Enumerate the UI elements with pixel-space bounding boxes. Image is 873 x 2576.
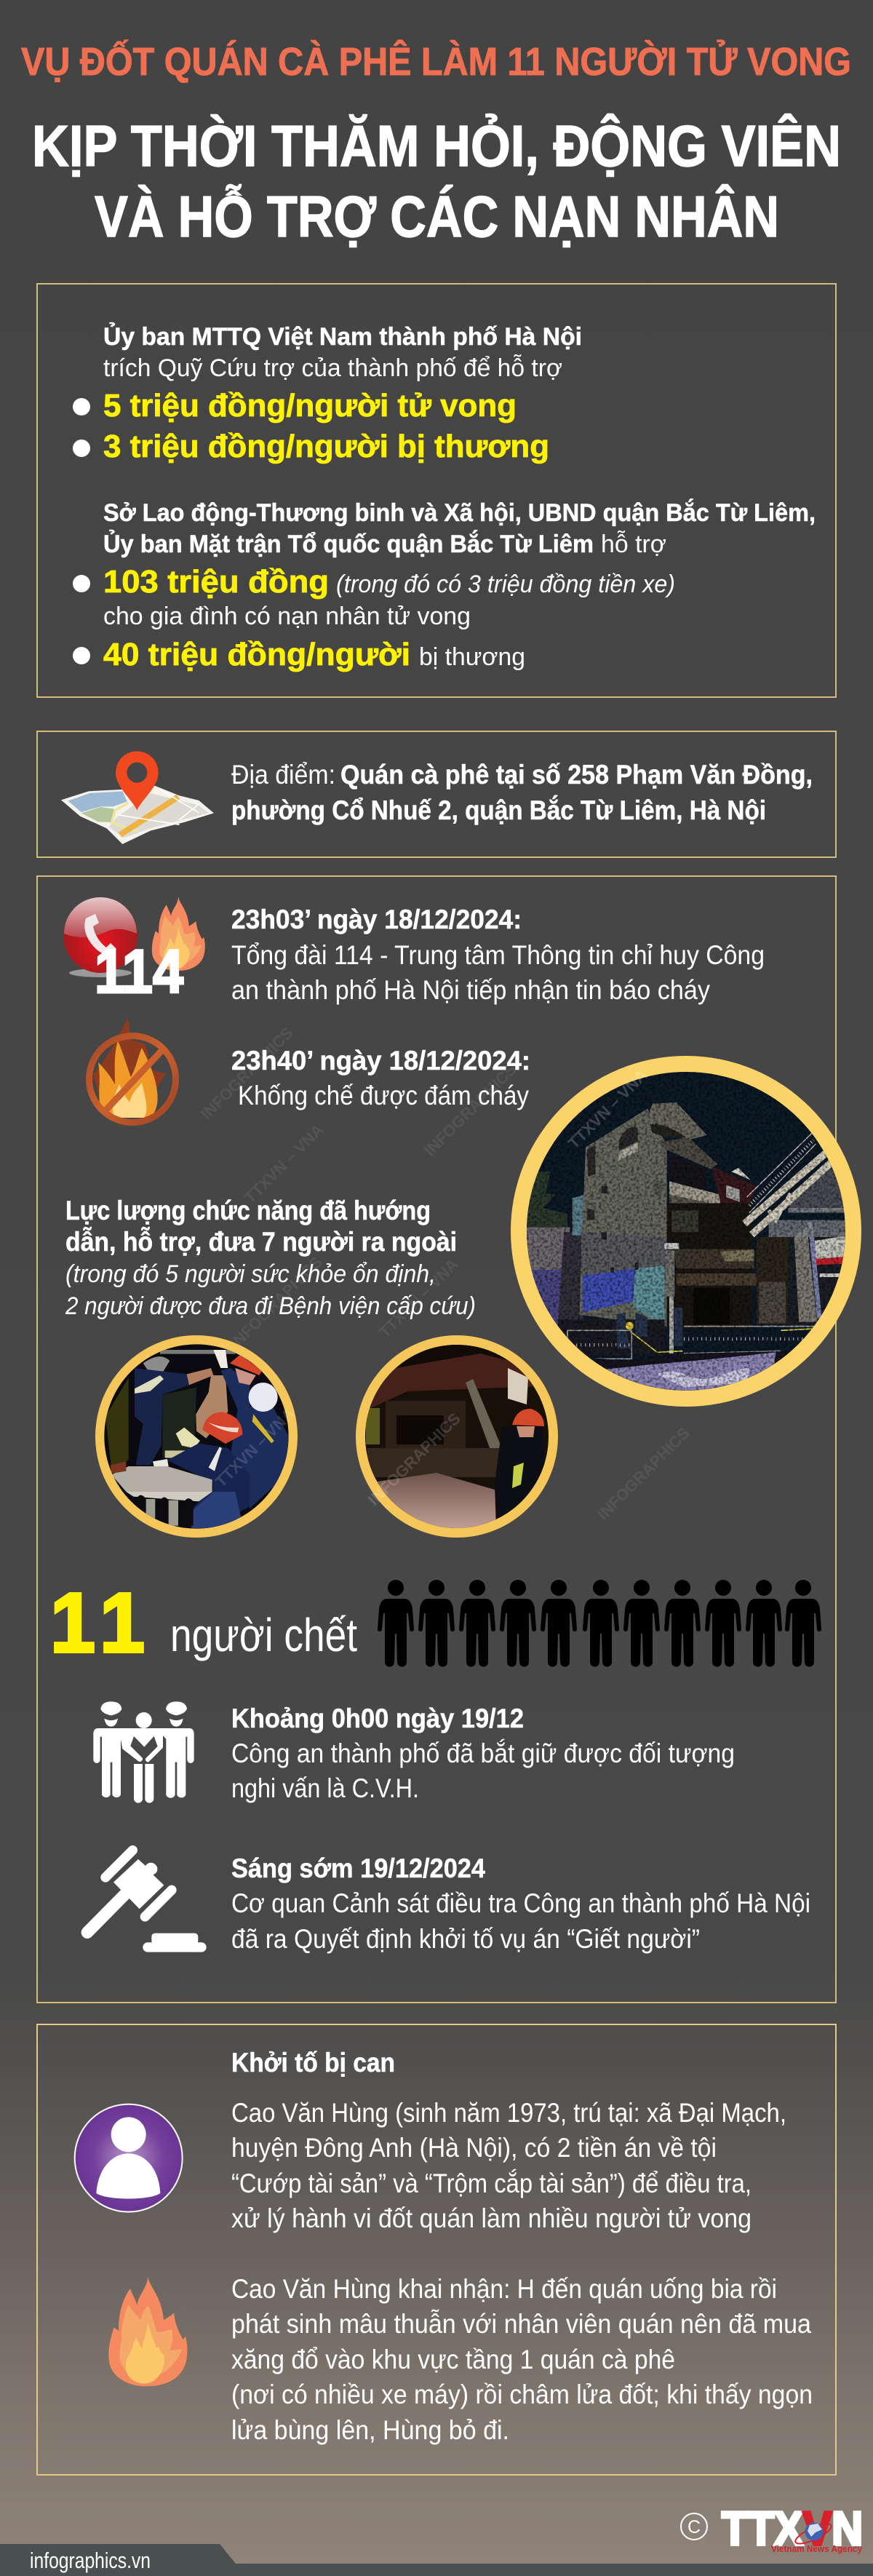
icon: 114 phone and flame bbox=[63, 897, 205, 1006]
number 114: 114 bbox=[95, 937, 183, 1006]
text: location label: Địa điểm: bbox=[231, 760, 335, 790]
photo watermark: TTXVN – VNA bbox=[212, 1404, 298, 1491]
footer band bbox=[0, 2544, 873, 2576]
logo: TTXVN bbox=[681, 2502, 863, 2555]
text: arrest: nghi vấn là C.V.H. bbox=[231, 1773, 419, 1803]
icon: police arrest bbox=[93, 1701, 194, 1803]
bullet: 103 million bbox=[73, 575, 90, 592]
watermarks: INFOGRAPHICS bbox=[226, 1253, 326, 1353]
bullet: 5 million bbox=[73, 398, 90, 416]
text: rescue description bbox=[65, 1196, 476, 1320]
photo watermark: TTXVN – VNA bbox=[565, 1066, 651, 1153]
text: rescue description: dẫn, hỗ trợ, đưa 7 người ra ngoài bbox=[65, 1227, 457, 1257]
icon: suspect bbox=[75, 2104, 183, 2212]
text: 23h03 event bbox=[231, 905, 765, 1005]
watermarks: TTXVN – VNA bbox=[241, 1121, 327, 1207]
icon: fire under control bbox=[89, 1016, 176, 1122]
phone ball highlight bbox=[64, 897, 137, 937]
text: confession: phát sinh mâu thuẫn với nhân viên quán nên đã mua bbox=[231, 2309, 811, 2339]
text: 23h03 event: Tổng đài 114 - Trung tâm Thông tin chỉ huy Công bbox=[231, 940, 765, 970]
panel: timeline bbox=[37, 876, 861, 2003]
photo: firefighters rescuing bbox=[95, 1335, 298, 1538]
text: address line 2: phường Cổ Nhuế 2, quận Bắc Từ Liêm, Hà Nội bbox=[231, 795, 766, 825]
number 11: 1 bbox=[50, 1575, 95, 1670]
text: confession: xăng đổ vào khu vực tầng 1 quán cà phê bbox=[231, 2345, 675, 2374]
phone ball bbox=[63, 899, 137, 973]
photo watermark: INFOGRAPHICS bbox=[364, 1410, 464, 1509]
text: injured: bị thương bbox=[419, 643, 525, 671]
text: arrest: Công an thành phố đã bắt giữ được đối tượng bbox=[231, 1738, 735, 1768]
text: 23h03 event: an thành phố Hà Nội tiếp nhận tin báo cháy bbox=[231, 975, 710, 1005]
text: confession bbox=[231, 2274, 813, 2445]
text: arrest: Khoảng 0h00 ngày 19/12 bbox=[231, 1704, 524, 1733]
phone handset bbox=[84, 914, 116, 956]
panel: support amounts bbox=[37, 284, 836, 697]
globe bbox=[793, 2520, 834, 2548]
watermarks bbox=[197, 1024, 693, 1524]
photo: burned street with firefighter bbox=[356, 1335, 558, 1538]
amount: 103 million: 103 triệu đồng bbox=[103, 564, 329, 600]
heading: prosecuted: Khởi tố bị can bbox=[231, 2048, 395, 2078]
bullet: 3 million bbox=[73, 440, 90, 457]
text: confession: Cao Văn Hùng khai nhận: H đến quán uống bia rồi bbox=[231, 2274, 777, 2304]
copyright mark: C bbox=[687, 2517, 701, 2537]
text: confession: lửa bùng lên, Hùng bỏ đi. bbox=[231, 2415, 509, 2445]
text: people dead: người chết bbox=[170, 1609, 357, 1661]
icon: gavel bbox=[87, 1850, 207, 1952]
bullet: 40 million bbox=[73, 647, 90, 664]
text: rescue description: (trong đó 5 người sức khỏe ổn định, bbox=[65, 1260, 436, 1288]
copyright mark bbox=[681, 2513, 707, 2540]
footer website: infographics.vn bbox=[30, 2548, 151, 2573]
text: support: hỗ trợ bbox=[601, 530, 666, 558]
text: address line 1: Quán cà phê tại số 258 Phạm Văn Đồng, bbox=[340, 760, 813, 790]
panel: prosecution bbox=[37, 2024, 836, 2475]
phone shadow bbox=[69, 969, 132, 977]
text: case opened: đã ra Quyết định khởi tố vụ án “Giết người” bbox=[231, 1924, 700, 1954]
panel: location bbox=[37, 731, 836, 857]
text: relief fund: trích Quỹ Cứu trợ của thành phố để hỗ trợ bbox=[103, 354, 562, 382]
main heading line 2: VÀ HỖ TRỢ CÁC NẠN NHÂN bbox=[95, 184, 779, 249]
text: 23h03 event: 23h03’ ngày 18/12/2024: bbox=[231, 905, 522, 934]
text: arrest bbox=[231, 1704, 735, 1803]
watermarks: INFOGRAPHICS bbox=[420, 1060, 520, 1160]
text: suspect background: Cao Văn Hùng (sinh năm 1973, trú tại: xã Đại Mạch, bbox=[231, 2098, 786, 2128]
watermarks: INFOGRAPHICS bbox=[594, 1424, 693, 1524]
text: district front: Ủy ban Mặt trận Tổ quốc quận Bắc Từ Liêm bbox=[103, 530, 594, 558]
amount: 3 million: 3 triệu đồng/người bị thương bbox=[103, 429, 549, 464]
icon: map with pin bbox=[61, 751, 214, 844]
text: rescue description: Lực lượng chức năng đã hướng bbox=[65, 1196, 431, 1225]
watermarks: INFOGRAPHICS bbox=[197, 1024, 297, 1124]
stat: 11 deaths bbox=[50, 1575, 821, 1670]
text: case opened: Cơ quan Cảnh sát điều tra Công an thành phố Hà Nội bbox=[231, 1888, 810, 1918]
number 11: 1 bbox=[100, 1575, 145, 1670]
text: 23h40 event bbox=[231, 1046, 530, 1110]
amount: 5 million: 5 triệu đồng/người tử vong bbox=[103, 388, 517, 424]
text: suspect background: “Cướp tài sản” và “Trộm cắp tài sản”) để điều tra, bbox=[231, 2168, 752, 2198]
photo: burned building bbox=[511, 1056, 861, 1407]
agency tagline: Vietnam News Agency bbox=[771, 2543, 863, 2554]
note: travel money: (trong đó có 3 triệu đồng tiền xe) bbox=[336, 571, 675, 598]
text: victims' families: cho gia đình có nạn nhân tử vong bbox=[103, 603, 471, 630]
text: suspect background bbox=[231, 2098, 786, 2233]
watermarks: TTXVN – VNA bbox=[375, 1255, 462, 1342]
text: 23h40 event: 23h40’ ngày 18/12/2024: bbox=[231, 1046, 530, 1076]
icon: flame bbox=[152, 897, 205, 971]
wordmark: TTXVN bbox=[722, 2502, 863, 2555]
title block bbox=[21, 39, 851, 249]
number 11 bbox=[50, 1575, 145, 1670]
text: confession: (nơi có nhiều xe máy) rồi châm lửa đốt; khi thấy ngọn bbox=[231, 2380, 813, 2409]
text: Department of Labour: Sở Lao động-Thương binh và Xã hội, UBND quận Bắc Từ Liêm, bbox=[103, 499, 816, 527]
text: suspect background: huyện Đông Anh (Hà Nội), có 2 tiền án về tội bbox=[231, 2133, 717, 2163]
text: Hanoi Fatherland Front: Ủy ban MTTQ Việt Nam thành phố Hà Nội bbox=[103, 323, 582, 351]
text: suspect background: xử lý hành vi đốt quán làm nhiều người tử vong bbox=[231, 2203, 752, 2233]
text: case opened bbox=[231, 1853, 810, 1954]
text: rescue description: 2 người được đưa đi Bệnh viện cấp cứu) bbox=[65, 1292, 476, 1320]
icon: eleven silhouettes bbox=[378, 1580, 821, 1666]
amount: 40 million: 40 triệu đồng/người bbox=[103, 637, 410, 672]
text: case opened: Sáng sớm 19/12/2024 bbox=[231, 1853, 485, 1883]
text: 23h40 event: Khống chế được đám cháy bbox=[238, 1081, 529, 1110]
icon: flame bbox=[108, 2276, 187, 2386]
